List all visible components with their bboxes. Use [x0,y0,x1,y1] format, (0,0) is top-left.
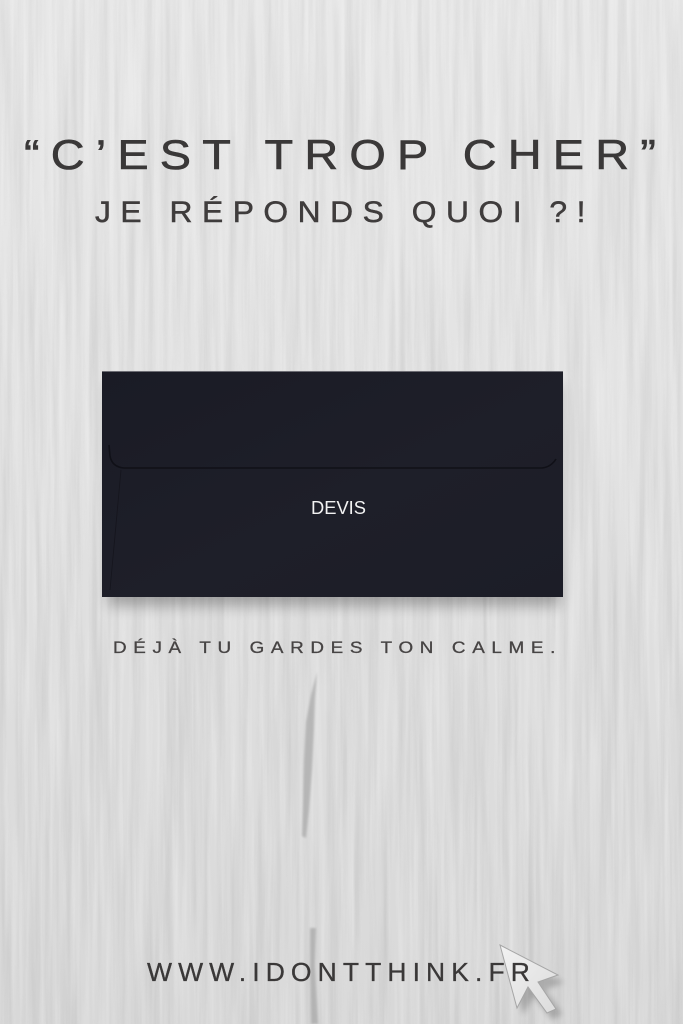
envelope top edge highlight [102,371,563,372]
envelope body [102,371,563,597]
website url: WWW.IDONTTHINK.FR [147,957,536,987]
envelope label: DEVIS [311,497,366,518]
wood crack [302,672,318,1024]
envelope left fold [110,470,121,590]
tagline: DÉJÀ TU GARDES TON CALME. [113,638,562,657]
envelope shadow [108,384,560,606]
envelope [102,371,563,606]
subtitle: JE RÉPONDS QUOI ?! [95,196,595,229]
envelope flap crease [109,445,556,468]
icon: cursor arrow [500,945,564,1020]
title: “C’EST TROP CHER” [24,131,667,178]
